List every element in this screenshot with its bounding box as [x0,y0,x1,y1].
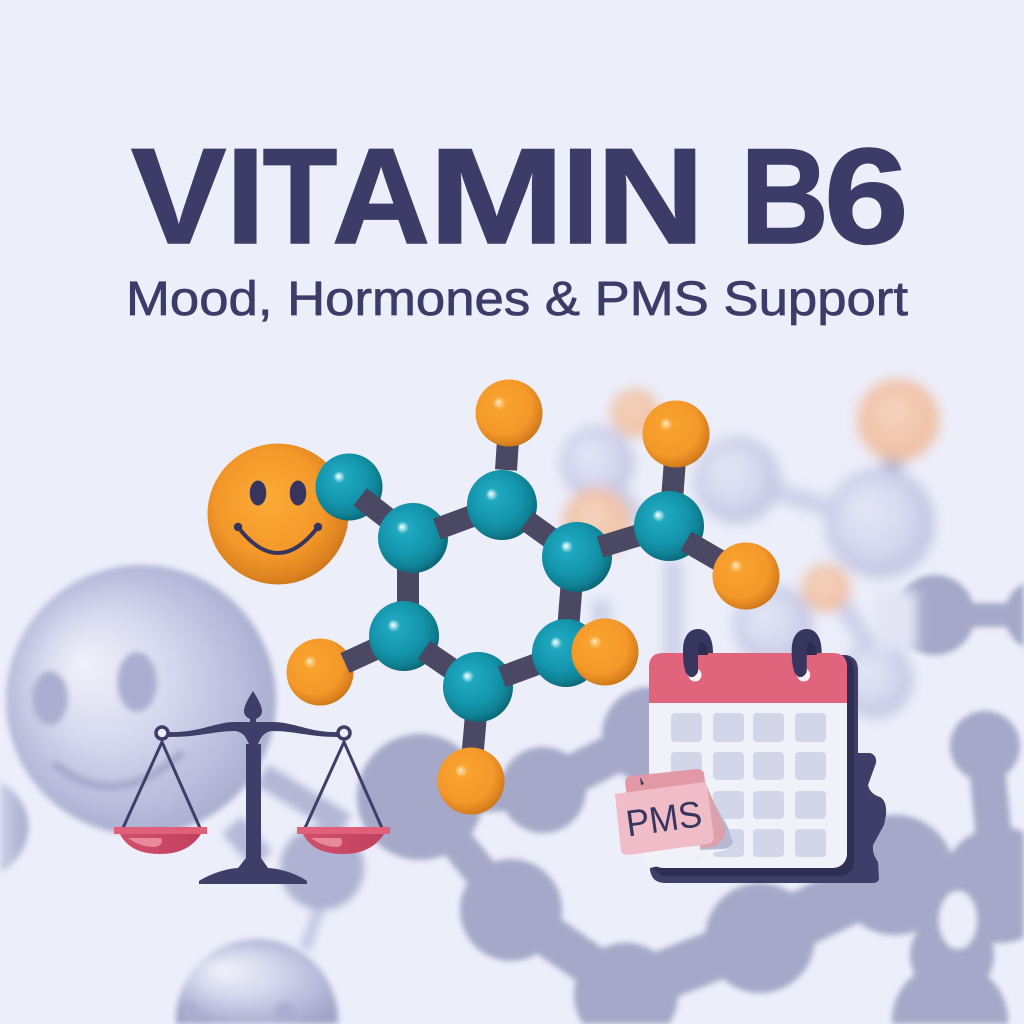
blurred molecule under the scale [232,775,364,950]
atom and bond chain: lower ring [369,601,600,722]
orange atoms [438,380,780,814]
scale finial [244,691,262,724]
calendar page [649,653,847,868]
blurred sphere at left edge [0,782,28,872]
title: B [740,121,829,272]
blurred background molecule shadow [357,575,1024,1024]
calendar inner strip [652,655,854,876]
scale beam [168,722,338,744]
title: T [263,121,337,272]
calendar grid [671,713,826,857]
left pan [114,827,207,854]
title [131,120,909,272]
blurred background molecule [560,379,939,718]
molecule: vitamin B6 ball and stick [286,380,780,814]
blurred smiley in background [6,565,276,835]
scale rings [156,727,168,739]
left orange atom and bond [286,636,404,706]
calendar ring right [792,629,822,677]
bonds behind atoms [408,440,675,760]
scale post and base [199,744,307,884]
title: I [562,120,599,272]
icon: smiley face [208,444,348,584]
calendar ring left [683,629,713,677]
PMS sticky note: PMS [623,793,704,844]
title: A [332,120,430,272]
lower blurred sphere [176,939,338,1024]
subtitle: Mood, Hormones & PMS Support [126,273,908,326]
title: N [597,121,705,272]
atom and bond chain: upper ring [316,454,746,592]
calendar header [649,653,847,703]
calendar binding hole right [797,668,810,682]
right pan [297,827,390,854]
title: 6 [824,120,909,272]
icon: balance scale [114,691,390,884]
calendar back plate [650,655,886,883]
PMS sticky note [615,769,733,868]
icon: calendar [615,629,886,883]
title: M [429,120,565,272]
title: VI [131,120,265,272]
calendar binding hole left [688,668,702,682]
scale ropes [123,742,382,828]
